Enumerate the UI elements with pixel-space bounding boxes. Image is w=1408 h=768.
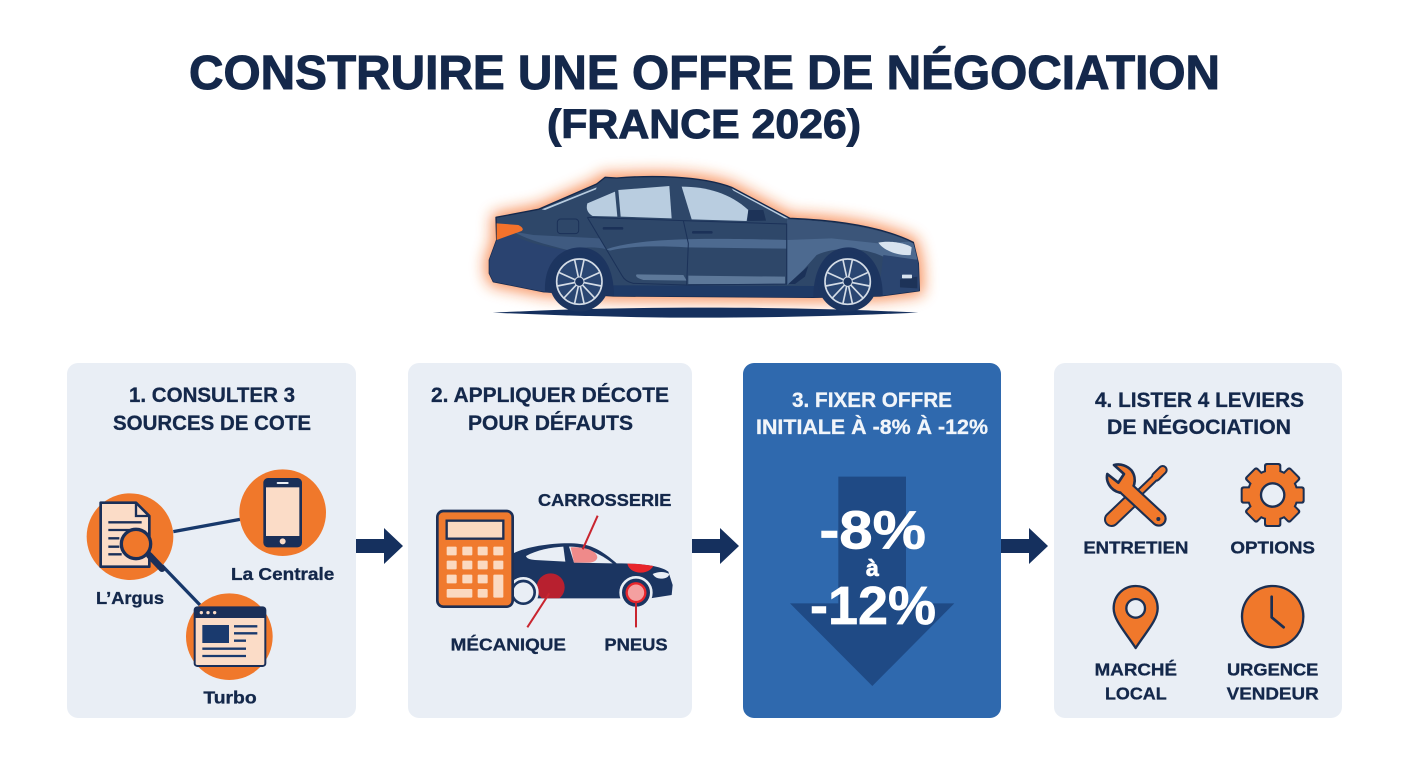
panel 2: appliquer décote xyxy=(408,363,692,718)
label: urgence vendeur: URGENCE xyxy=(1227,660,1318,680)
title: (FRANCE 2026) xyxy=(547,101,861,147)
panel 4 heading xyxy=(1095,389,1304,439)
front wheel xyxy=(818,252,878,312)
panel 2 heading xyxy=(431,384,669,435)
panel 2 heading: 2. APPLIQUER DÉCOTE xyxy=(431,384,669,407)
icon: clock xyxy=(1242,586,1303,647)
panel 1 heading: SOURCES DE COTE xyxy=(113,412,311,435)
panel 2 heading: POUR DÉFAUTS xyxy=(468,412,633,435)
label: carrosserie: CARROSSERIE xyxy=(538,490,671,510)
label: urgence vendeur: VENDEUR xyxy=(1227,683,1319,703)
sources network xyxy=(87,469,334,707)
label: La Centrale: La Centrale xyxy=(231,564,334,584)
panel 3 heading: INITIALE À -8% À -12% xyxy=(756,416,988,439)
discount figures: à xyxy=(866,555,880,581)
panel 1: consulter 3 sources xyxy=(67,363,356,718)
down arrow with discount range xyxy=(790,477,954,686)
discount figures xyxy=(810,501,936,636)
arrow 1 xyxy=(356,528,403,564)
panel 1 heading: 1. CONSULTER 3 xyxy=(129,384,295,407)
discount figures: -8% xyxy=(819,501,926,560)
icon: Turbo browser xyxy=(186,593,273,680)
panel 3 heading xyxy=(756,389,988,439)
panel 4 heading: 4. LISTER 4 LEVIERS xyxy=(1095,389,1304,412)
label: marché local: MARCHÉ xyxy=(1095,659,1177,680)
label: entretien: ENTRETIEN xyxy=(1083,538,1188,558)
label: options: OPTIONS xyxy=(1230,538,1315,558)
title: CONSTRUIRE UNE OFFRE DE NÉGOCIATION xyxy=(189,46,1220,100)
label: urgence vendeur xyxy=(1227,660,1319,703)
icon: map pin xyxy=(1114,586,1158,648)
label: mécanique: MÉCANIQUE xyxy=(451,633,566,654)
rear wheel xyxy=(549,252,609,312)
arrow 2 xyxy=(692,528,739,564)
panel 3: fixer offre xyxy=(743,363,1001,718)
icon: La Centrale phone xyxy=(239,469,326,556)
calculator and damaged car xyxy=(437,490,673,654)
discount figures: -12% xyxy=(810,577,936,636)
calculator xyxy=(437,511,513,607)
icon: L'Argus document xyxy=(87,493,173,580)
icon: gear xyxy=(1241,463,1305,527)
panel 4 heading: DE NÉGOCIATION xyxy=(1107,416,1291,439)
icon: tools xyxy=(1107,464,1163,521)
title xyxy=(189,46,1220,147)
panel 4: leviers xyxy=(1054,363,1342,718)
label: marché local xyxy=(1095,659,1177,703)
panel 1 heading xyxy=(113,384,311,435)
arrow 3 xyxy=(1001,528,1048,564)
car illustration xyxy=(483,177,920,318)
levers grid xyxy=(1083,463,1319,703)
label: Turbo: Turbo xyxy=(203,687,257,707)
damaged car xyxy=(509,543,673,608)
label: L'Argus: L’Argus xyxy=(96,588,164,608)
label: pneus: PNEUS xyxy=(604,634,668,654)
label: marché local: LOCAL xyxy=(1105,683,1167,703)
panel 3 heading: 3. FIXER OFFRE xyxy=(792,389,952,412)
